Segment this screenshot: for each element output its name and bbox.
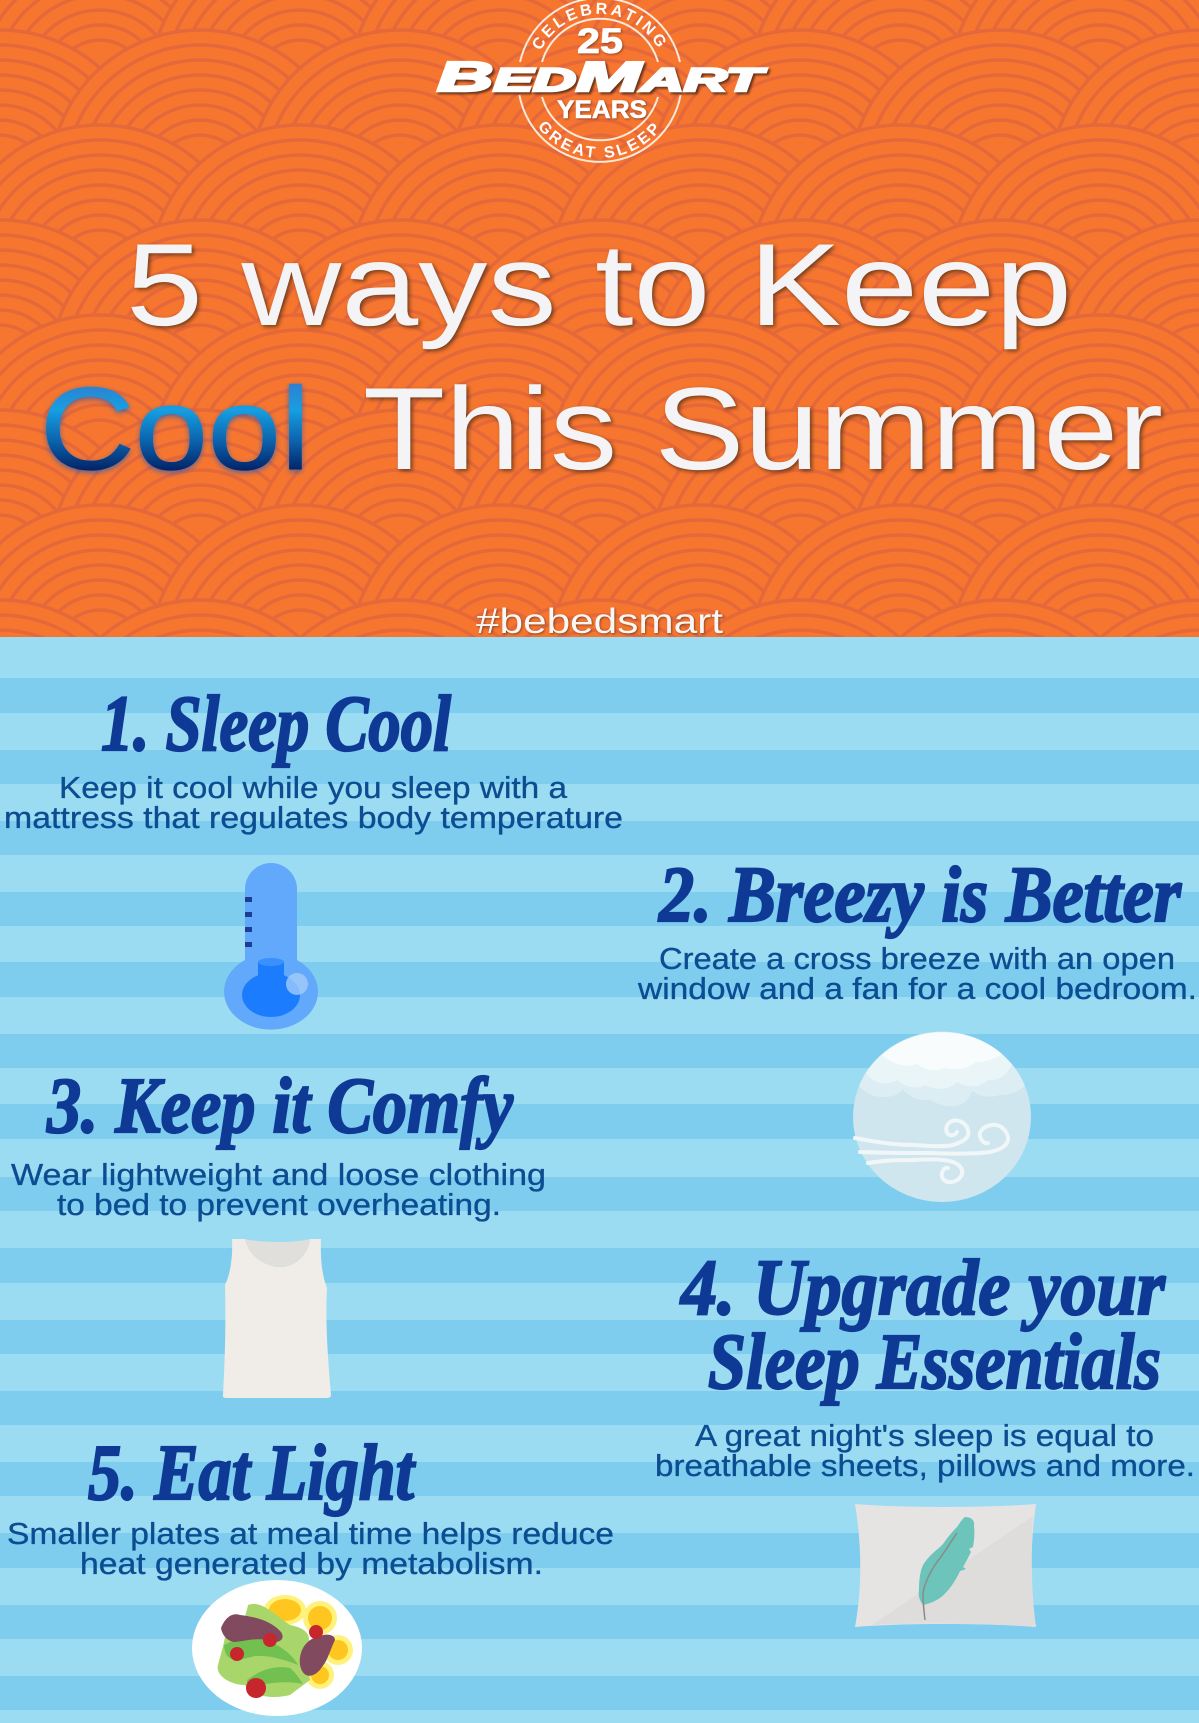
text 2: window and a fan for a cool bedroom. [637,971,1197,1006]
title: 5 ways to Keep: 5 ways to Keep [126,219,1072,350]
text 3: to bed to prevent overheating. [57,1187,501,1222]
text 3: Wear lightweight and loose clothing [11,1157,546,1192]
panel: blue striped background [0,637,1199,1723]
logo: BedMart 25 years badge: 25 [577,22,623,61]
text 2: Create a cross breeze with an open [659,941,1175,976]
icon: wind globe [853,1032,1031,1202]
text 5: Smaller plates at meal time helps reduce [7,1516,614,1551]
icon: thermometer [224,863,318,1030]
text 5: heat generated by metabolism. [80,1546,543,1581]
logo: BedMart 25 years badge: CELEBRATING [533,2,666,49]
text 4: breathable sheets, pillows and more. [655,1448,1195,1483]
panel: orange header background [0,0,1199,637]
text 3 [11,1157,546,1222]
title: This Summer: This Summer [363,363,1163,494]
text 4 [655,1418,1195,1483]
heading 5: 5. Eat Light [88,1430,416,1517]
hashtag: #bebedsmart [476,602,723,641]
tip 4: Upgrade your Sleep Essentials [655,1245,1195,1627]
text 1: Keep it cool while you sleep with a [59,770,568,805]
logo: BedMart 25 years badge [436,0,772,163]
heading 1: 1. Sleep Cool [101,681,451,768]
title: Cool: Cool [40,363,310,494]
heading 4 [679,1245,1166,1406]
text 5 [7,1516,614,1581]
icon: pillow with feather [855,1504,1036,1627]
heading 4: 4. Upgrade your [679,1245,1166,1332]
logo: BedMart 25 years badge: YEARS [557,96,647,124]
text 4: A great night's sleep is equal to [695,1418,1154,1453]
icon: salad plate [192,1580,362,1716]
icon: tank top [223,1239,331,1398]
tip 2: Breezy is Better [637,852,1197,1202]
tip 3: Keep it Comfy [11,1063,546,1398]
text 1: mattress that regulates body temperature [4,800,623,835]
text 2 [637,941,1197,1006]
text 1 [4,770,623,835]
logo: BedMart 25 years badge: B ED M ART [437,53,767,100]
heading 3: 3. Keep it Comfy [46,1063,514,1150]
logo: BedMart 25 years badge: GREAT SLEEP [540,122,656,158]
tip 5: Eat Light [7,1430,614,1716]
tip 1: Sleep Cool [4,681,623,1030]
